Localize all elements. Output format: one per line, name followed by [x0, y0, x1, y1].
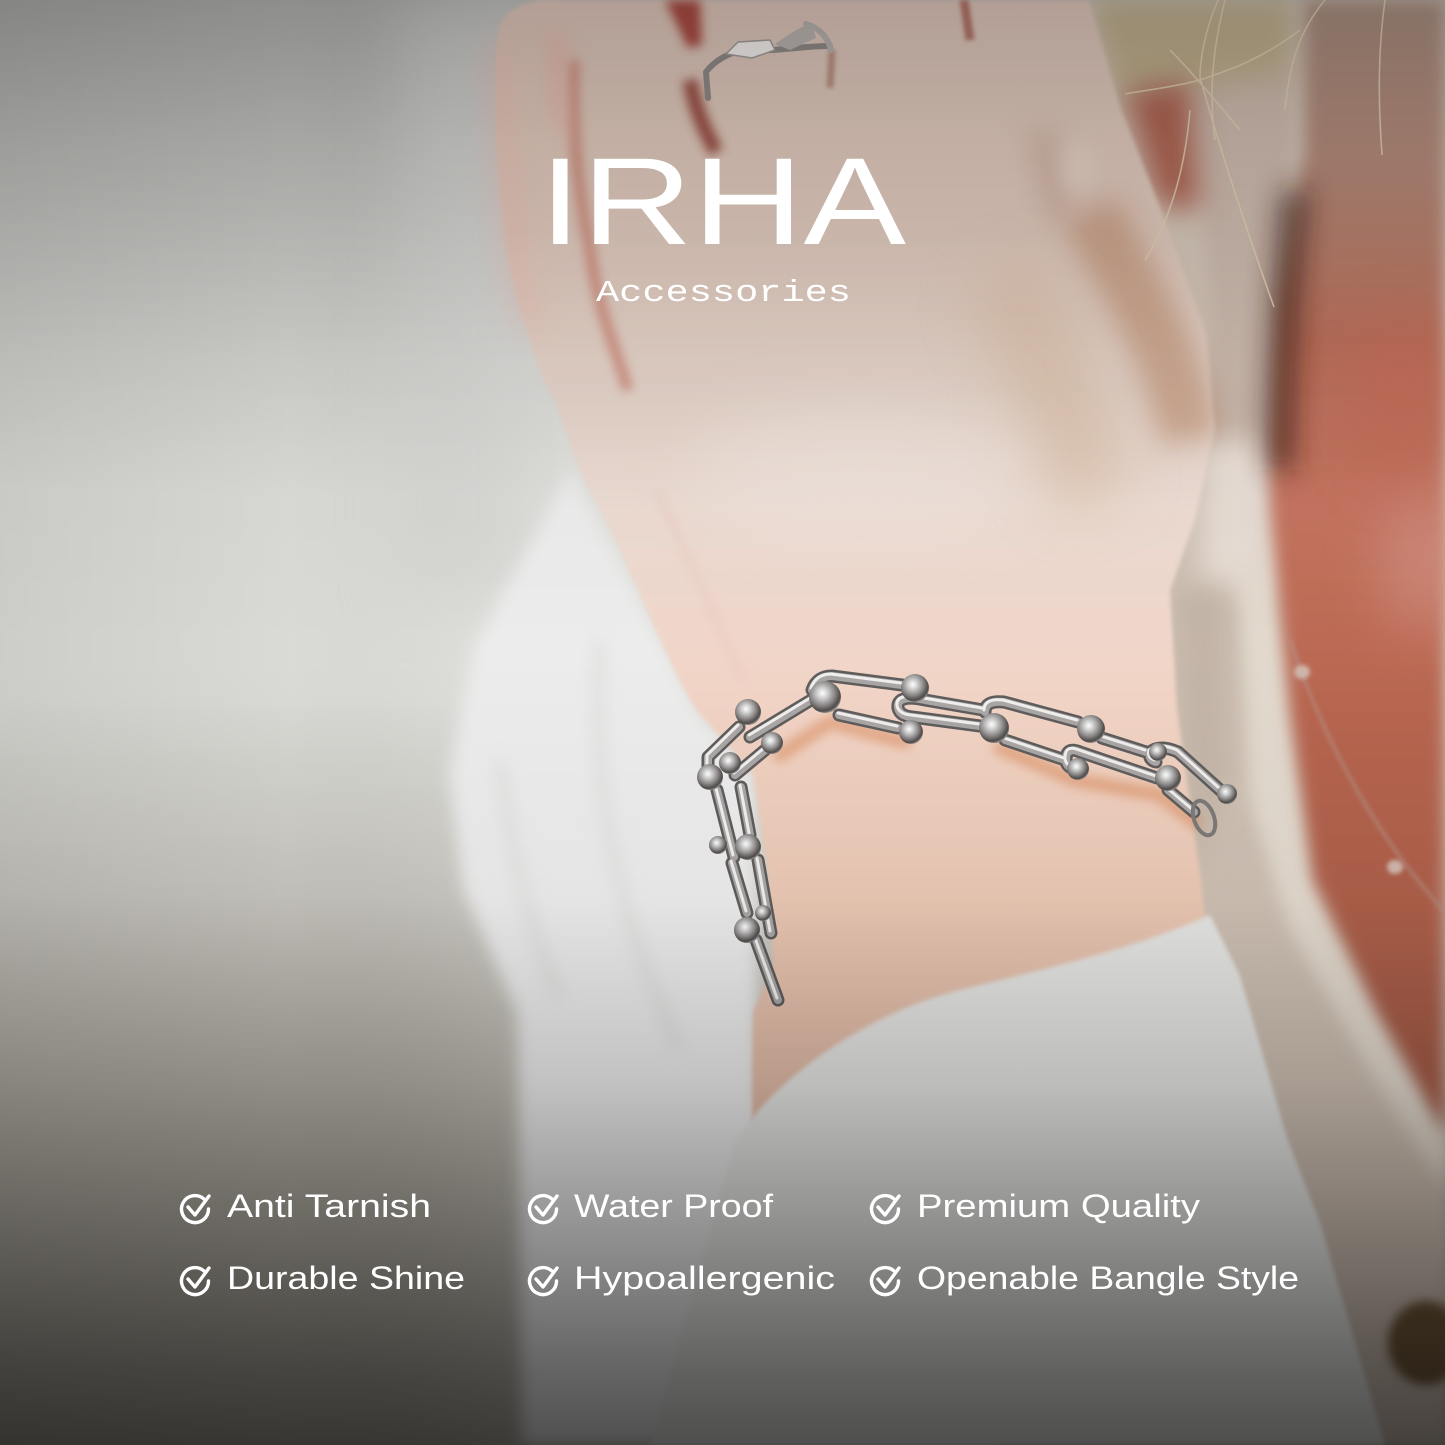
bracelet: link rods [707, 674, 1220, 1000]
brand name: IRHA [539, 133, 906, 271]
feature: Premium Quality: Premium Quality [917, 1188, 1200, 1224]
feature list [182, 1188, 1299, 1296]
feature: Hypoallergenic: Hypoallergenic [574, 1260, 835, 1296]
feature: Water Proof: Water Proof [574, 1188, 773, 1224]
photo: blouse button [1388, 1301, 1445, 1385]
title [539, 133, 906, 311]
bracelet: silver link chain [697, 674, 1237, 1000]
necklace chain [1290, 640, 1445, 912]
hair strands [1125, 0, 1385, 307]
feature: Anti Tarnish: Anti Tarnish [227, 1188, 431, 1224]
bracelet: contact shadow on skin [780, 722, 1195, 822]
bracelet: ball studs [697, 674, 1237, 943]
feature: Water Proof [530, 1188, 773, 1224]
photo: shirt cuff [650, 915, 1385, 1445]
photo: hand and wrist [496, 0, 1230, 1125]
photo: finger and knuckle shading [497, 0, 1190, 680]
feature: Anti Tarnish [182, 1188, 431, 1224]
icon: ring on finger [706, 24, 831, 98]
feature: Durable Shine: Durable Shine [227, 1260, 465, 1296]
subtitle: Accessories [596, 276, 851, 311]
photo: blouse, hair and neck on the right [1085, 0, 1445, 1445]
feature: Hypoallergenic [530, 1260, 835, 1296]
photo: white shirt sleeve [450, 470, 1000, 1445]
feature: Openable Bangle Style: Openable Bangle Style [917, 1260, 1299, 1296]
bracelet: clasp ring [1188, 798, 1220, 838]
